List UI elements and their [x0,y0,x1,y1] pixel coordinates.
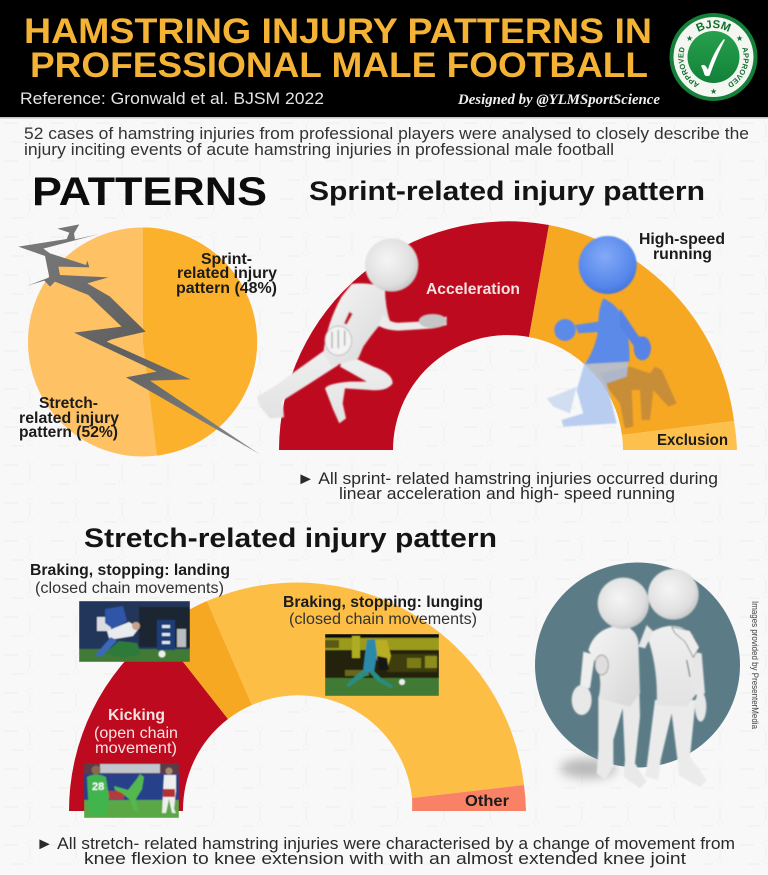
bullet: sprint note [297,470,718,503]
photo: landing [79,601,190,662]
image credit: Images provided by PresenterMedia [749,601,760,730]
label: kicking: movement) [95,740,177,757]
label: exclusion: Exclusion [657,432,728,449]
segment: lunging [207,583,524,798]
icon: BJSM approved badge: ★ [686,34,693,43]
label: high-speed running: running [653,246,712,263]
segment: high-speed running [529,225,734,435]
heading: patterns: PATTERNS [32,170,267,214]
label: sprint share: Sprint- [201,251,252,268]
figure: blue runner [547,236,677,428]
label: stretch share: Stretch- [39,395,98,412]
title [24,12,652,85]
segment: kicking [69,630,228,811]
segment: exclusion [622,421,737,450]
icon: BJSM approved badge: ★ [710,87,717,96]
header banner [0,0,768,118]
figures: two supporting people [535,562,740,788]
label: lunging [283,594,483,628]
icon: BJSM approved badge: APPROVED [678,47,700,88]
heading: sprint-related: Sprint-related injury pattern [309,176,705,206]
label: kicking: (open chain [94,725,178,742]
icon: BJSM approved badge [670,13,758,101]
pie chart: injury patterns [18,224,277,456]
intro text: injury inciting events of acute hamstring injuries in professional male football [24,140,614,159]
bullet: sprint note: ► All sprint- related hamstring injuries occurred during [297,470,718,488]
icon: BJSM approved badge: APPROVED [728,48,749,87]
segment: landing [158,601,252,719]
left figure [597,690,647,788]
intro text [24,124,749,159]
label: kicking: Kicking [108,707,165,724]
label: acceleration: Acceleration [426,281,520,298]
label: lunging: (closed chain movements) [289,611,477,628]
icon: BJSM approved badge: ★ [736,34,743,43]
chart: stretch arch [69,583,526,811]
label: landing: Braking, stopping: landing [30,562,230,579]
bullet: stretch note: ► All stretch- related hamstring injuries were characterised by a change of movement from [36,835,735,853]
label: landing [30,562,230,597]
right figure [645,700,707,787]
icon: BJSM approved badge: BJSM [696,20,732,32]
chart: sprint arch [279,221,737,450]
label: other: Other [465,793,509,810]
label: sprint share [176,251,277,297]
ghost blue leg [562,360,628,427]
title: PROFESSIONAL MALE FOOTBALL [30,46,648,85]
bullet: stretch note: knee flexion to knee extension with with an almost extended knee joint [84,850,686,868]
label: stretch share [19,395,119,441]
label: sprint share: related injury [177,265,277,282]
designer credit: Designed by @YLMSportScience [457,92,660,108]
ghost brown leg [600,367,677,428]
label: sprint share: pattern (48%) [176,280,277,297]
figure: white runner [257,238,447,423]
intro text: 52 cases of hamstring injuries from professional players were analysed to closely describe the [24,124,749,143]
label: high-speed running: High-speed [639,231,725,248]
title: HAMSTRING INJURY PATTERNS IN [24,12,652,51]
segment: acceleration [279,221,549,450]
heading: stretch-related: Stretch-related injury pattern [84,523,497,553]
label: landing: (closed chain movements) [35,580,224,597]
label: high-speed running [639,231,725,263]
label: stretch share: related injury [19,410,119,427]
bullet: sprint note: linear acceleration and high- speed running [339,485,675,503]
reference line: Reference: Gronwald et al. BJSM 2022 [20,89,324,108]
bullet: stretch note [36,835,735,868]
photo: kicking: 28 [92,781,104,793]
photo: lunging [325,634,439,696]
segment: other [412,785,526,811]
label: stretch share: pattern (52%) [19,424,118,441]
label: lunging: Braking, stopping: lunging [283,594,483,611]
label: kicking [94,707,178,757]
photo: kicking [84,763,179,818]
icon: lightning crack [18,224,259,454]
